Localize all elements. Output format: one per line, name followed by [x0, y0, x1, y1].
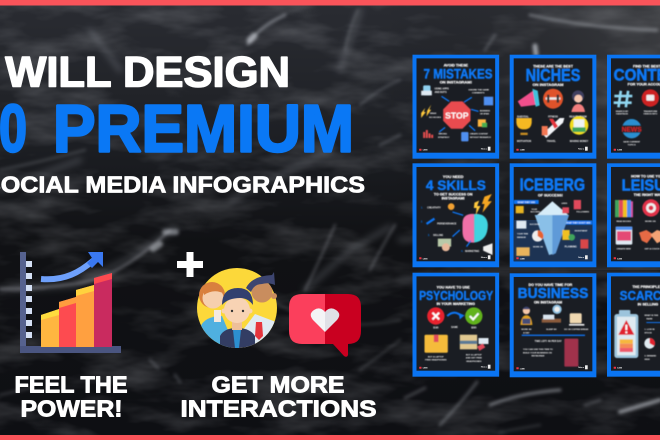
icon: growth bar chart: [20, 252, 121, 353]
panel: iceberg: WHAT THEY DON'T SEE: [566, 222, 591, 225]
caption: get more interactions: INTERACTIONS: [180, 396, 376, 422]
panel: niches: ON INSTAGRAM: [533, 82, 564, 87]
panel: 7 mistakes: 7 MISTAKES: [423, 66, 492, 81]
panel: psychology: BUY A LAPTOP: [466, 353, 482, 356]
panel: iceberg: [510, 163, 596, 267]
caption: feel the power: FEEL THE: [14, 372, 128, 398]
panel: scarcity: STOCK: [644, 332, 652, 334]
panel: 7 mistakes: BUSINESS: [480, 110, 491, 112]
panel: niches: [510, 55, 596, 159]
panel: content: TRANSFORM: [643, 110, 657, 113]
bottom red bar: [0, 435, 660, 440]
panel: leisure: READ BOOKS: [616, 220, 632, 223]
panel: business: WORK 8H: [521, 329, 532, 331]
panel: content: FIND THE BEST: [633, 64, 660, 68]
panel: content: SEARCH BY: [616, 110, 629, 113]
panel: 4 skills: 4 SKILLS: [426, 177, 486, 193]
panel: business: SLEEP 8H: [546, 329, 557, 331]
panel: 4 skills: TO GET SUCCESS ON: [434, 192, 473, 196]
caption: feel the power: POWER!: [20, 396, 122, 422]
panel: iceberg: LIKES: [561, 203, 568, 205]
panel: iceberg: FOLLOWERS: [576, 212, 590, 214]
panel: 7 mistakes: STRATEGY: [438, 136, 450, 139]
panel: iceberg: YOUR TIME: [517, 234, 529, 236]
panel: 7 mistakes: USING APPS: [434, 88, 449, 91]
panel: business: [510, 273, 596, 377]
panel: psychology: HEADPHONES: [466, 360, 482, 363]
panel: 7 mistakes: CREATE CONTENT: [470, 133, 489, 136]
panel: niches: FITNESS: [548, 116, 558, 118]
panel: scarcity: [607, 273, 660, 377]
panel: 7 mistakes: [412, 55, 499, 159]
panel: niches: THESE ARE THE BEST: [533, 64, 574, 68]
panel: 4 skills: 3.: [428, 235, 430, 237]
panel: scarcity: RARE: [646, 317, 653, 320]
panel: niches: MOTIVATION: [517, 140, 531, 143]
panel: 7 mistakes: WITHOUT RESEARCH: [470, 136, 491, 139]
panel: 7 mistakes: NO HOOKS: [429, 117, 441, 119]
panel: iceberg: MANAGE: [517, 236, 527, 239]
panel: 7 mistakes: WEAK: [430, 112, 437, 115]
panel: 7 mistakes: AVOID THESE: [444, 64, 469, 68]
panel: leisure: GET A COUCH: [645, 247, 660, 250]
panel: business: DO 3H COFFEE BREAK: [564, 328, 589, 331]
panel: business: YOU CAN USE THIS TIME TO: [523, 348, 553, 351]
top red bar: [0, 0, 660, 6]
caption: feel the power: [14, 372, 128, 422]
panel: content: [607, 55, 660, 159]
panel: psychology: FREE HEADPHONES: [425, 359, 447, 362]
panel: psychology: SAME: [451, 326, 458, 329]
panel: content: VIDEOS INTO: [643, 114, 658, 116]
panel: 4 skills: MARKETING: [465, 250, 479, 253]
panel: leisure: WORK ON: [645, 221, 656, 223]
panel: content: SAVE CURRENT: [623, 141, 641, 144]
panel: 7 mistakes: COMMENTS: [472, 93, 485, 95]
panel: business: TIME LEFT: 4H PER DAY: [535, 340, 562, 343]
panel: business: BUSINESS: [518, 286, 589, 302]
panel: 7 mistakes: ON INSTAGRAM!: [440, 80, 472, 85]
panel: business: INSTAGRAM: [531, 355, 544, 358]
panel: scarcity: WHAT IS THE: [644, 314, 659, 317]
panel: psychology: YOU HAVE TO USE: [436, 286, 470, 290]
panel: business: DO YOU HAVE TIME FOR: [528, 283, 573, 287]
panel: iceberg: SUCCESS: [530, 224, 540, 226]
panel: scarcity: 3. DEMAND: [644, 355, 657, 358]
panel: iceberg: YOUR: [531, 209, 538, 211]
panel: iceberg: OF SUCCESS!: [538, 194, 563, 198]
panel: 7 mistakes: WRONG: [438, 134, 447, 136]
panel: psychology: $195: [433, 328, 439, 330]
icon: plus: [177, 252, 203, 277]
panel: iceberg: ICEBERG: [520, 175, 585, 195]
panel: iceberg: SUCCESS: [530, 212, 541, 214]
panel: scarcity: IN SELLING: [638, 302, 658, 306]
caption: get more interactions: GET MORE: [212, 372, 344, 398]
panel: scarcity: 1. LOW IN: [644, 329, 655, 331]
panel: psychology: IN YOUR MARKETING: [437, 302, 475, 306]
panel: business: ON INSTAGRAM: [534, 300, 562, 304]
panel: 4 skills: YOU NEED: [443, 174, 464, 179]
panel: 4 skills: CREATIVITY: [427, 206, 441, 209]
panel: niches: TRAVEL: [547, 140, 557, 143]
panel: iceberg: WHAT THEY SEE: [518, 201, 536, 204]
panel: niches: BEAUTY ROOM: [569, 115, 587, 118]
panel: 4 skills: PERSEVERANCE: [437, 222, 457, 225]
panel: 7 mistakes: IGNORE THE GAME: [468, 89, 490, 92]
panel: 4 skills: 4.: [461, 250, 463, 253]
panel: content: NEWS: [622, 127, 642, 134]
caption: get more interactions: [180, 372, 376, 422]
panel: 7 mistakes: AND BOTS: [434, 91, 447, 94]
panel: scarcity: HIGH: [644, 359, 650, 361]
panel: 4 skills: SELLING: [433, 235, 443, 237]
panel: leisure: [607, 163, 660, 267]
panel: psychology: $295: [471, 328, 477, 330]
panel: content: TOPICS: [628, 144, 636, 146]
panel: psychology: PSYCHOLOGY: [419, 289, 494, 303]
icon: heart speech bubble: [289, 294, 361, 357]
panel: content: HASHTAGS: [616, 113, 629, 116]
panel: iceberg: INVESTMENT: [575, 231, 588, 233]
panel: 7 mistakes: STOP: [445, 111, 469, 121]
panel: 4 skills: 1.: [421, 207, 423, 209]
panel: niches: MAKING MONEY: [570, 140, 589, 143]
title line: 10 premium: PREMIUM: [53, 92, 354, 166]
panel: iceberg: PLANNING: [565, 245, 577, 248]
panel: business: BUILD YOUR BUSINESS ON: [523, 352, 552, 354]
icon: group of people: [197, 268, 277, 350]
panel: niches: BABYFIAL: [517, 115, 529, 118]
panel: psychology: AND GET FREE: [466, 357, 482, 360]
panel: 7 mistakes: OR SPAM: [480, 113, 489, 116]
panel: psychology: BUY A LAPTOP: [428, 355, 444, 358]
panel: niches: NICHES: [526, 65, 580, 85]
panel: 4 skills: INSTAGRAM!: [442, 196, 465, 200]
panel: 4 skills: [412, 163, 499, 267]
panel: psychology: [412, 273, 499, 377]
panel: 4 skills: 2.: [421, 221, 423, 223]
panel: business: A DAY: [523, 331, 530, 334]
panel: leisure: CREATE NEW: [616, 247, 632, 250]
panel: iceberg: WORK ON: [533, 246, 543, 248]
